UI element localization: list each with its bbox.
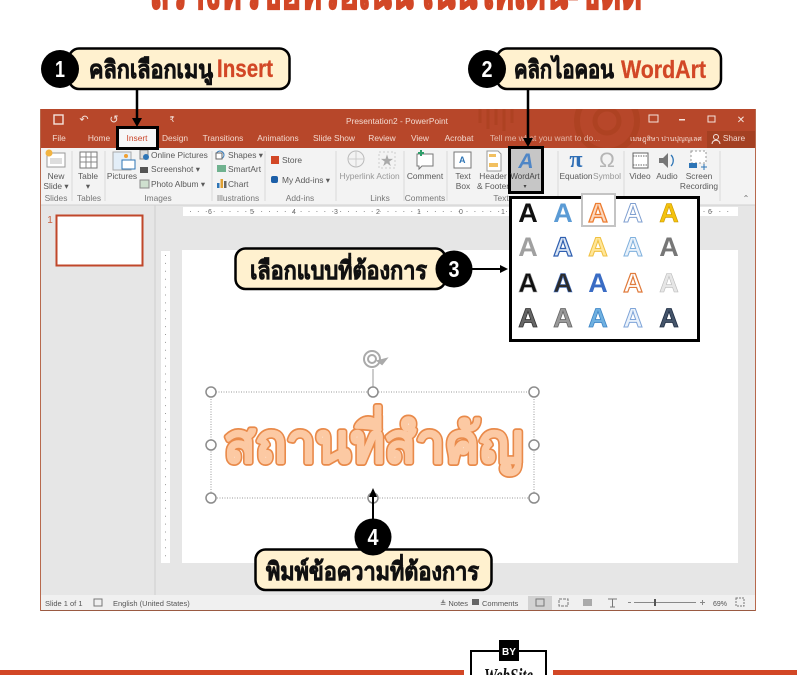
callout 3 [236, 248, 472, 289]
callout 3: เลือกแบบที่ต้องการ [250, 253, 427, 285]
workspace rulers: 6 [708, 209, 712, 216]
WordArt gallery [510, 194, 698, 340]
WordArt gallery: A [553, 232, 573, 262]
arrow: step 2 [523, 89, 533, 147]
WordArt gallery: A [623, 268, 643, 298]
title bar: Share [723, 133, 746, 143]
callout 2: WordArt [621, 56, 707, 84]
callout 1 [41, 48, 290, 89]
slide canvas [182, 250, 738, 563]
workspace rulers: 3 [334, 209, 338, 216]
ribbon: Slides [45, 193, 67, 203]
callout 2: 2 [482, 56, 492, 82]
WordArt button highlight [510, 148, 542, 192]
WordArt sample text: สถานที่สำคัญ [224, 406, 523, 474]
ribbon: Comment [407, 171, 444, 181]
workspace rulers: 5 [250, 209, 254, 216]
ribbon: Header [479, 171, 507, 181]
WordArt gallery: A [553, 303, 573, 333]
workspace rulers: 1 [417, 209, 421, 216]
ribbon: Screen [686, 171, 713, 181]
WordArt gallery: A [623, 232, 643, 262]
title bar: ✕ [737, 115, 745, 126]
ribbon: Illustrations [217, 193, 259, 203]
WordArt button highlight: WordArt [510, 172, 540, 181]
status bar: Comments [482, 599, 519, 608]
ribbon: Text [455, 171, 471, 181]
WordArt button highlight: ▾ [523, 184, 527, 190]
status bar: 69% [713, 601, 727, 608]
WordArt gallery: A [588, 232, 608, 262]
ribbon: Text [493, 193, 509, 203]
title bar: เมษฎุสิษา ปานปุญญเลศ [630, 135, 702, 144]
title bar: Animations [257, 133, 299, 143]
title bar: View [411, 133, 430, 143]
icon: rotate handle [364, 351, 386, 367]
WordArt gallery: A [623, 198, 643, 228]
WordArt gallery: A [588, 303, 608, 333]
WordArt sample text: สถานที่สำคัญ [224, 406, 523, 474]
title bar: ↺ [109, 114, 119, 126]
ribbon: & Footer [477, 181, 509, 191]
callout 4 [256, 518, 492, 590]
workspace rulers [41, 205, 756, 595]
callout 2 [468, 48, 721, 89]
title bar: Home [88, 133, 111, 143]
title bar: Design [162, 133, 188, 143]
arrow: step 1 [132, 89, 142, 127]
status bar: Slide 1 of 1 [45, 599, 83, 608]
title bar: Presentation2 - PowerPoint [346, 116, 449, 126]
WordArt gallery: A [588, 268, 608, 298]
ribbon: Video [629, 171, 651, 181]
WordArt gallery: A [518, 268, 538, 298]
title bar: ↶ [79, 114, 89, 126]
ribbon: Table [78, 171, 98, 181]
ribbon: ⌃ [743, 194, 749, 203]
ribbon: Slide ▾ [43, 181, 69, 191]
ribbon: Online Pictures [151, 150, 208, 160]
ribbon: ▾ [86, 181, 91, 191]
ribbon: Links [370, 193, 390, 203]
ribbon: Recording [680, 181, 718, 191]
ribbon: Store [282, 155, 302, 165]
callout 1: 1 [55, 56, 65, 82]
title bar: ₹ [169, 115, 175, 124]
ribbon: Action [376, 171, 400, 181]
ribbon: ★ [380, 153, 394, 168]
WordArt gallery: A [588, 198, 608, 228]
ribbon: Photo Album ▾ [151, 179, 206, 189]
title bar: File [52, 133, 66, 143]
WordArt button highlight: A [517, 150, 534, 173]
ribbon: Audio [656, 171, 678, 181]
ribbon: Symbol [593, 171, 621, 181]
status bar [40, 595, 756, 610]
callout 2: คลิกไอคอน [514, 54, 614, 84]
arrow: step 3 [470, 265, 508, 273]
workspace rulers: 4 [292, 209, 296, 216]
WordArt gallery: A [659, 198, 679, 228]
ribbon: Box [456, 181, 471, 191]
title bar: Tell me what you want to do... [490, 133, 600, 143]
WordArt gallery: A [659, 232, 679, 262]
workspace rulers: 1 [501, 209, 505, 216]
ribbon: Equation [559, 171, 593, 181]
status bar: English (United States) [113, 599, 190, 608]
title bar: Transitions [203, 133, 243, 143]
footer bar right [553, 670, 797, 675]
logo: By WebSite: BY [502, 647, 516, 658]
title bar: Acrobat [445, 133, 474, 143]
callout 1: คลิกเลือกเมนู [89, 56, 213, 86]
callout 4: พิมพ์ข้อความที่ต้องการ [266, 554, 479, 586]
ribbon: Ω [599, 149, 615, 172]
ribbon: Add-ins [286, 193, 314, 203]
panel: PowerPoint window screenshot [40, 91, 756, 611]
WordArt gallery: A [518, 303, 538, 333]
WordArt gallery: A [623, 303, 643, 333]
slide thumbnail [47, 215, 142, 266]
insert tab label: Insert [127, 133, 148, 143]
footer bar left [0, 670, 464, 675]
callout 1: Insert [217, 55, 274, 83]
logo: By WebSite [471, 640, 546, 675]
insert tab highlight [118, 128, 158, 148]
workspace rulers: 6 [208, 209, 212, 216]
ribbon: SmartArt [228, 164, 262, 174]
WordArt gallery: A [659, 268, 679, 298]
WordArt gallery: A [553, 268, 573, 298]
ribbon: My Add-ins ▾ [282, 175, 331, 185]
ribbon [41, 147, 756, 205]
callout 3: 3 [448, 256, 460, 282]
ribbon: Shapes ▾ [228, 150, 264, 160]
ribbon: Hyperlink [340, 171, 375, 181]
slide thumbnail: 1 [47, 215, 53, 226]
workspace rulers: 2 [376, 209, 380, 216]
WordArt gallery: A [659, 303, 679, 333]
ribbon: Pictures [107, 171, 137, 181]
ribbon: Comments [405, 193, 445, 203]
title bar [41, 109, 755, 148]
ribbon: Screenshot ▾ [151, 164, 201, 174]
WordArt gallery: A [518, 198, 538, 228]
ribbon: Tables [77, 193, 101, 203]
callout 4: 4 [368, 524, 379, 550]
ribbon: Chart [228, 179, 249, 189]
workspace rulers: 0 [459, 209, 463, 216]
title bar: Slide Show [313, 133, 356, 143]
ribbon: A [459, 155, 466, 165]
WordArt gallery: A [553, 198, 573, 228]
ribbon: Images [144, 193, 172, 203]
arrow: step 4 [369, 488, 377, 522]
ribbon: New [48, 171, 65, 181]
WordArt selection box [206, 351, 539, 503]
ribbon: π [569, 147, 583, 173]
title bar: Review [368, 133, 397, 143]
WordArt gallery: A [518, 232, 538, 262]
status bar: ≜ Notes [440, 599, 468, 608]
